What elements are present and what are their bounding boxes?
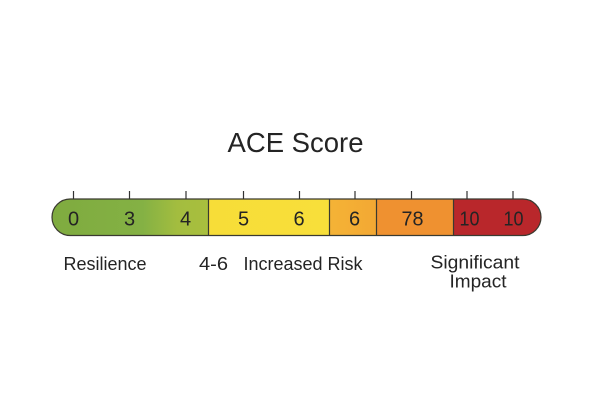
- label: Resilience: Resilience: [64, 254, 146, 274]
- segment: orange: [376, 199, 454, 236]
- scale numbers: 6: [349, 208, 360, 230]
- label: 4-6: 4-6: [199, 254, 228, 274]
- segment: red: [454, 199, 542, 236]
- scale numbers: 0: [68, 208, 79, 230]
- label: Significant Impact: Significant: [430, 252, 520, 272]
- scale numbers: 78: [402, 208, 424, 230]
- tick marks: [74, 191, 513, 199]
- bar outline: [52, 199, 541, 236]
- scale numbers: 4: [180, 208, 191, 230]
- title: ACE Score: [228, 127, 364, 158]
- scale numbers: 10: [504, 208, 524, 230]
- scale numbers: [68, 208, 524, 230]
- label: Significant Impact: [430, 252, 520, 292]
- scale numbers: 6: [293, 208, 305, 230]
- segment: yellow: [208, 199, 330, 236]
- scale numbers: 3: [124, 208, 135, 230]
- ACE score scale bar: [52, 191, 542, 236]
- label: Increased Risk: Increased Risk: [244, 254, 363, 274]
- scale numbers: 5: [238, 208, 249, 230]
- label: Significant Impact: Impact: [450, 272, 506, 292]
- scale numbers: 10: [460, 208, 480, 230]
- segment: green resilience: [52, 199, 208, 236]
- segment: light orange: [330, 199, 376, 236]
- segment dividers: [208, 199, 454, 236]
